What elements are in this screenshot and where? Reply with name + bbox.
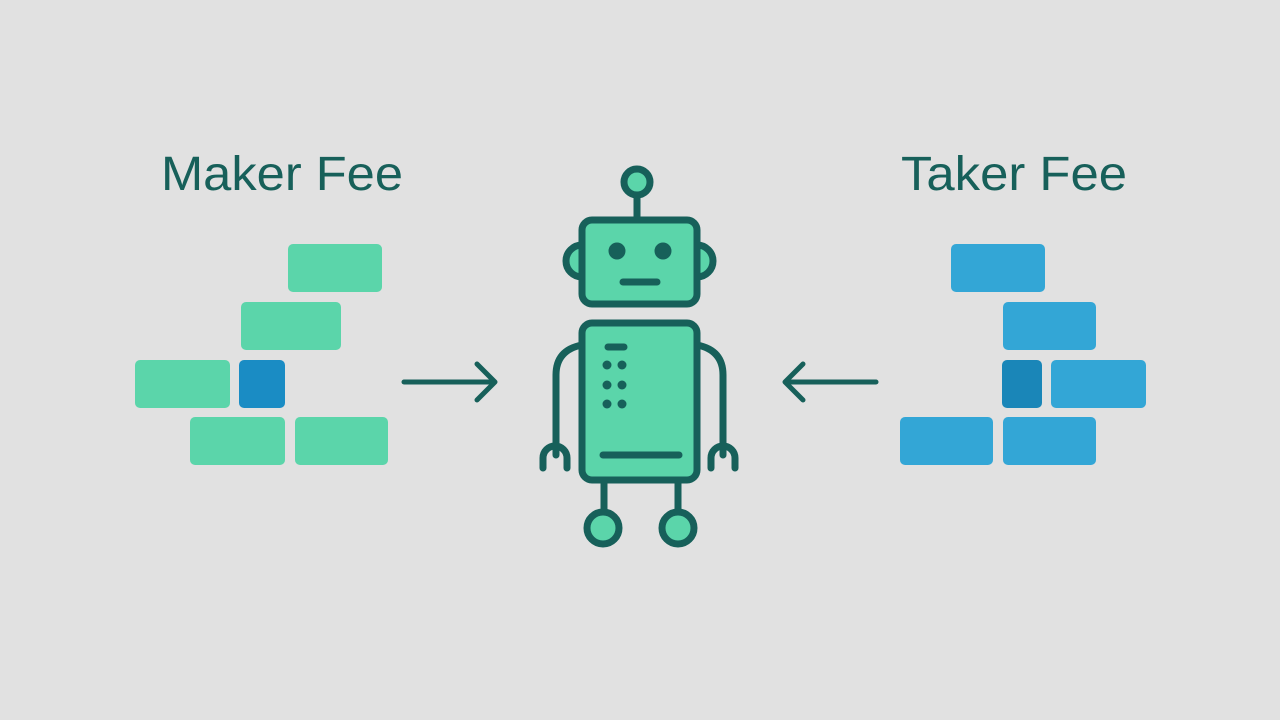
icon: robot bbox=[543, 169, 735, 544]
title: Maker Fee: Maker Fee bbox=[161, 148, 403, 201]
maker order blocks bbox=[135, 244, 388, 465]
taker order blocks bbox=[900, 244, 1146, 465]
arrow: taker to robot bbox=[785, 364, 876, 400]
arrow: maker to robot bbox=[404, 364, 495, 400]
title: Taker Fee: Taker Fee bbox=[901, 148, 1127, 201]
